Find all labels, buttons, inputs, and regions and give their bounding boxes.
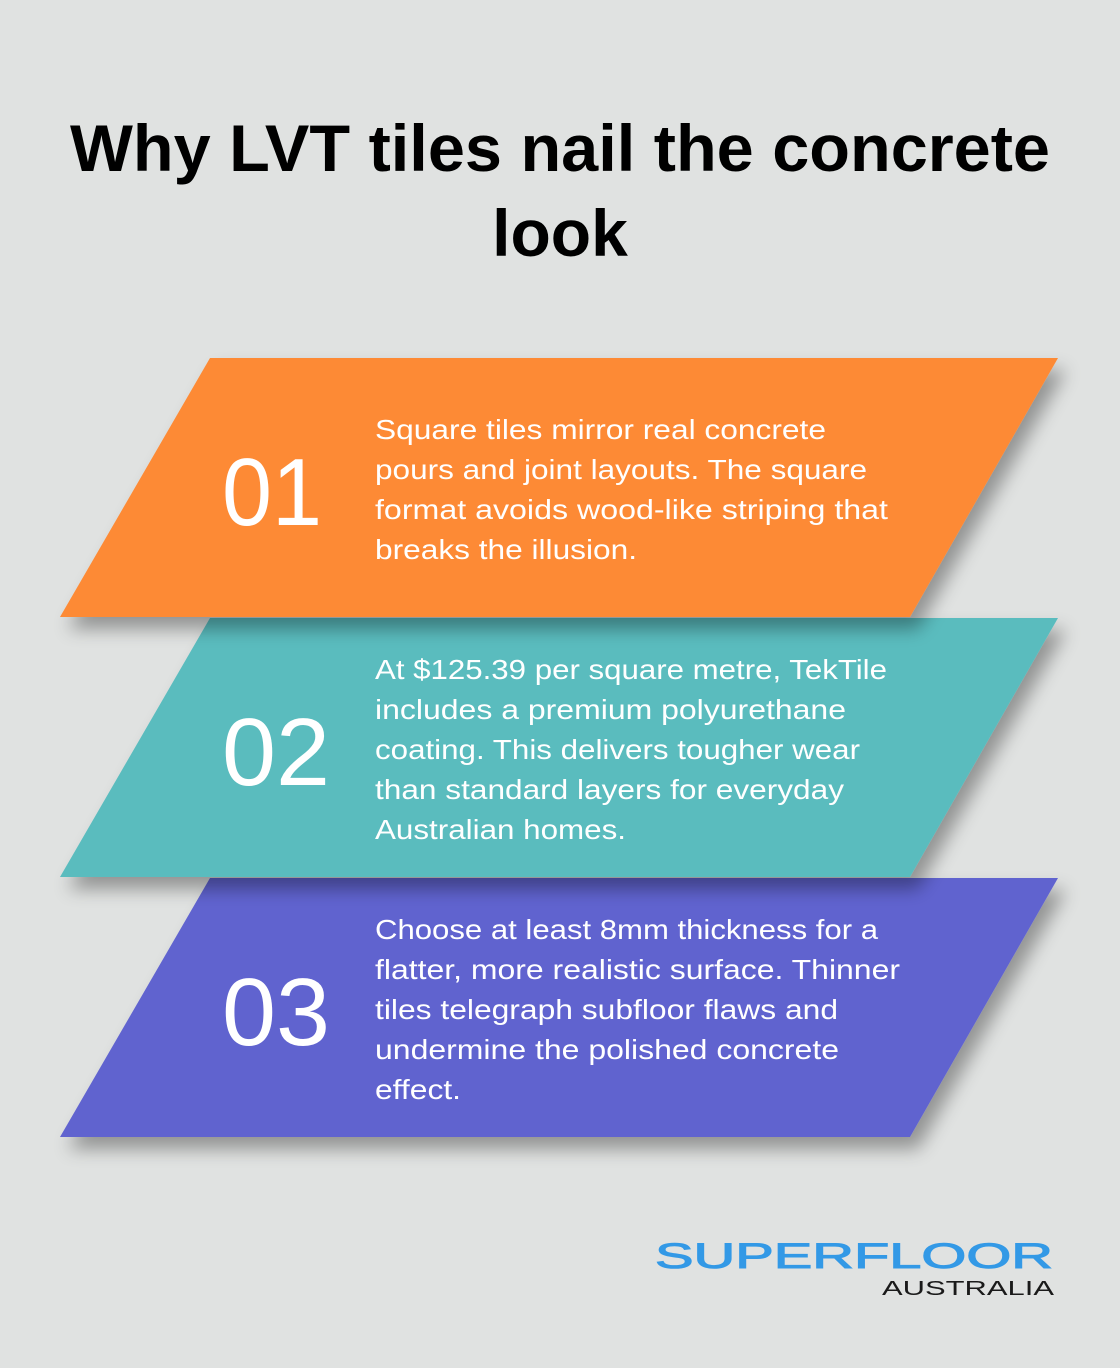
logo [655,1237,1055,1300]
text block 01: Square tiles mirror real concrete [375,414,826,445]
text block 02: Australian homes. [375,814,626,845]
text block 02: coating. This delivers tougher wear [375,734,860,765]
number 03: 03 [222,959,330,1066]
text block 01 [375,414,888,565]
title [70,111,1050,270]
text block 03 [375,914,900,1105]
logo: AUSTRALIA [882,1278,1055,1300]
text block 02 [375,654,887,845]
text block 03: undermine the polished concrete [375,1034,839,1065]
panel: 01 [60,358,1058,617]
panel: 02 [60,618,1058,877]
text block 01: breaks the illusion. [375,534,637,565]
text block 02: includes a premium polyurethane [375,694,846,725]
text block 03: flatter, more realistic surface. Thinner [375,954,900,985]
text block 03: effect. [375,1074,461,1105]
text block 01: pours and joint layouts. The square [375,454,867,485]
number 02: 02 [222,699,330,806]
title: look [492,196,628,270]
text block 02: At $125.39 per square metre, TekTile [375,654,887,685]
logo: SUPERFLOOR [655,1237,1053,1276]
number 01: 01 [222,439,322,546]
title: Why LVT tiles nail the concrete [70,111,1050,185]
text block 02: than standard layers for everyday [375,774,844,805]
text block 01: format avoids wood-like striping that [375,494,888,525]
panel: 03 [60,878,1058,1137]
text block 03: Choose at least 8mm thickness for a [375,914,878,945]
text block 03: tiles telegraph subfloor flaws and [375,994,838,1025]
